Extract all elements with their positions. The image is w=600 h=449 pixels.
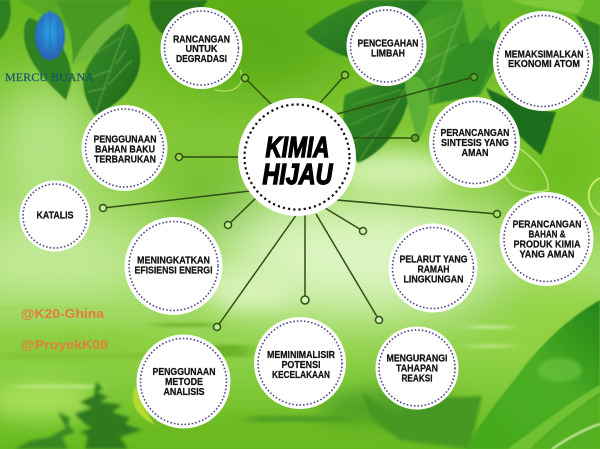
node: Penggunaan bahan baku terbarukan: BAHAN BAKU	[95, 144, 155, 156]
node: Meminimalisir potensi kecelakaan: MEMINIMALISIR	[267, 350, 336, 361]
leaf behind connector	[343, 82, 410, 163]
center hub: Kimia Hijau	[238, 98, 356, 216]
node: Pelarut yang ramah lingkungan: LINGKUNGAN	[404, 275, 464, 286]
node: Katalis	[20, 180, 90, 252]
connector: kecelakaan	[301, 214, 309, 304]
handle: ProyekK08: @ProyekK08	[21, 338, 108, 352]
node: Meningkatkan efisiensi energi	[124, 217, 222, 315]
leaf bottom-left of metode	[133, 385, 155, 425]
connector: metode	[214, 214, 297, 330]
leaf behind logo	[24, 18, 72, 100]
node: Penggunaan bahan baku terbarukan: PENGGUNAAN	[94, 134, 156, 146]
connector: sintesis	[350, 134, 418, 142]
node: Rancangan untuk degradasi	[160, 7, 242, 89]
logo: Mercu Buana	[5, 10, 95, 84]
node: Rancangan untuk degradasi: RANCANGAN	[173, 34, 230, 46]
node: Perancangan bahan dan produk kimia yang aman: YANG AMAN	[520, 250, 574, 260]
node: Penggunaan metode analisis	[136, 334, 230, 428]
node: Penggunaan bahan baku terbarukan	[82, 105, 168, 191]
decorative leaf rings	[505, 140, 548, 192]
node: Perancangan sintesis yang aman: SINTESIS YANG	[441, 138, 509, 149]
node: Rancangan untuk degradasi: UNTUK	[186, 44, 218, 55]
pale leaves top	[20, 0, 75, 30]
node: Perancangan bahan dan produk kimia yang aman: PERANCANGAN	[512, 220, 582, 230]
node: Meminimalisir potensi kecelakaan: POTENSI	[282, 360, 321, 371]
center hub: Kimia Hijau: HIJAU	[262, 159, 333, 191]
connector: ekonomi atom	[337, 74, 478, 114]
right leaf cluster underlay	[400, 0, 500, 105]
leaf behind rancangan	[150, 0, 208, 40]
node: Memaksimalkan ekonomi atom	[493, 11, 593, 111]
big leaf bottom right	[466, 300, 600, 449]
node: Mengurangi tahapan reaksi: REAKSI	[402, 374, 433, 385]
leaf behind pencegahan	[305, 0, 430, 58]
reflection in water	[0, 306, 510, 422]
connector: bahan produk	[337, 200, 500, 218]
center hub: Kimia Hijau: KIMIA	[266, 132, 330, 164]
node: Meminimalisir potensi kecelakaan: KECELAKAAN	[272, 370, 330, 381]
node: Rancangan untuk degradasi: DEGRADASI	[176, 54, 227, 65]
node: Mengurangi tahapan reaksi	[376, 326, 458, 410]
node: Memaksimalkan ekonomi atom: EKONOMI ATOM	[508, 59, 580, 70]
node: Pelarut yang ramah lingkungan: RAMAH	[418, 265, 450, 276]
node: Mengurangi tahapan reaksi: MENGURANGI	[386, 354, 448, 365]
node: Pencegahan limbah: PENCEGAHAN	[358, 38, 418, 50]
node: Penggunaan metode analisis: METODE	[165, 377, 203, 388]
node: Penggunaan bahan baku terbarukan: TERBARUKAN	[94, 154, 156, 166]
node: Perancangan sintesis yang aman: PERANCANGAN	[440, 128, 510, 139]
connector: efisiensi	[224, 198, 256, 228]
node: Perancangan sintesis yang aman: AMAN	[462, 148, 488, 159]
node: Pelarut yang ramah lingkungan: PELARUT YANG	[400, 255, 468, 266]
icon: logo drop	[35, 10, 65, 60]
leaf top-left	[0, 0, 11, 44]
large dark leaf	[83, 23, 140, 116]
node: Perancangan sintesis yang aman	[429, 97, 520, 188]
node: Meminimalisir potensi kecelakaan	[254, 317, 346, 409]
node: Pencegahan limbah	[346, 6, 426, 86]
connector: katalis	[100, 191, 250, 212]
node: Pencegahan limbah: LIMBAH	[371, 48, 405, 60]
handle: K20-Ghina: @K20-Ghina	[21, 307, 105, 321]
connector: pelarut	[325, 208, 366, 234]
central upper leaf	[423, 6, 465, 103]
node: Perancangan bahan dan produk kimia yang aman	[500, 192, 594, 286]
connector: limbah	[320, 72, 348, 103]
node: Meningkatkan efisiensi energi: EFISIENSI ENERGI	[134, 266, 213, 277]
node: Perancangan bahan dan produk kimia yang aman: BAHAN &	[528, 230, 566, 240]
dark tree reflection	[14, 382, 142, 449]
reflection under mengurangi	[362, 392, 482, 449]
leaves top	[0, 0, 600, 163]
node: Memaksimalkan ekonomi atom: MEMAKSIMALKAN	[504, 50, 584, 60]
node: Penggunaan metode analisis: ANALISIS	[164, 387, 205, 398]
node: Meningkatkan efisiensi energi: MENINGKATKAN	[137, 256, 210, 267]
node: Pelarut yang ramah lingkungan	[388, 224, 478, 312]
connector: rancangan	[242, 74, 272, 105]
connector: tahapan	[316, 214, 382, 324]
logo wordmark: MERCU BUANA	[5, 72, 95, 84]
dark lower-right leaf	[486, 88, 556, 155]
node: Penggunaan metode analisis: PENGGUNAAN	[152, 367, 216, 378]
node: Perancangan bahan dan produk kimia yang aman: PRODUK KIMIA	[514, 240, 580, 250]
node: Katalis: KATALIS	[36, 210, 74, 222]
connector: bahan baku	[176, 154, 240, 160]
node: Mengurangi tahapan reaksi: TAHAPAN	[396, 364, 438, 375]
